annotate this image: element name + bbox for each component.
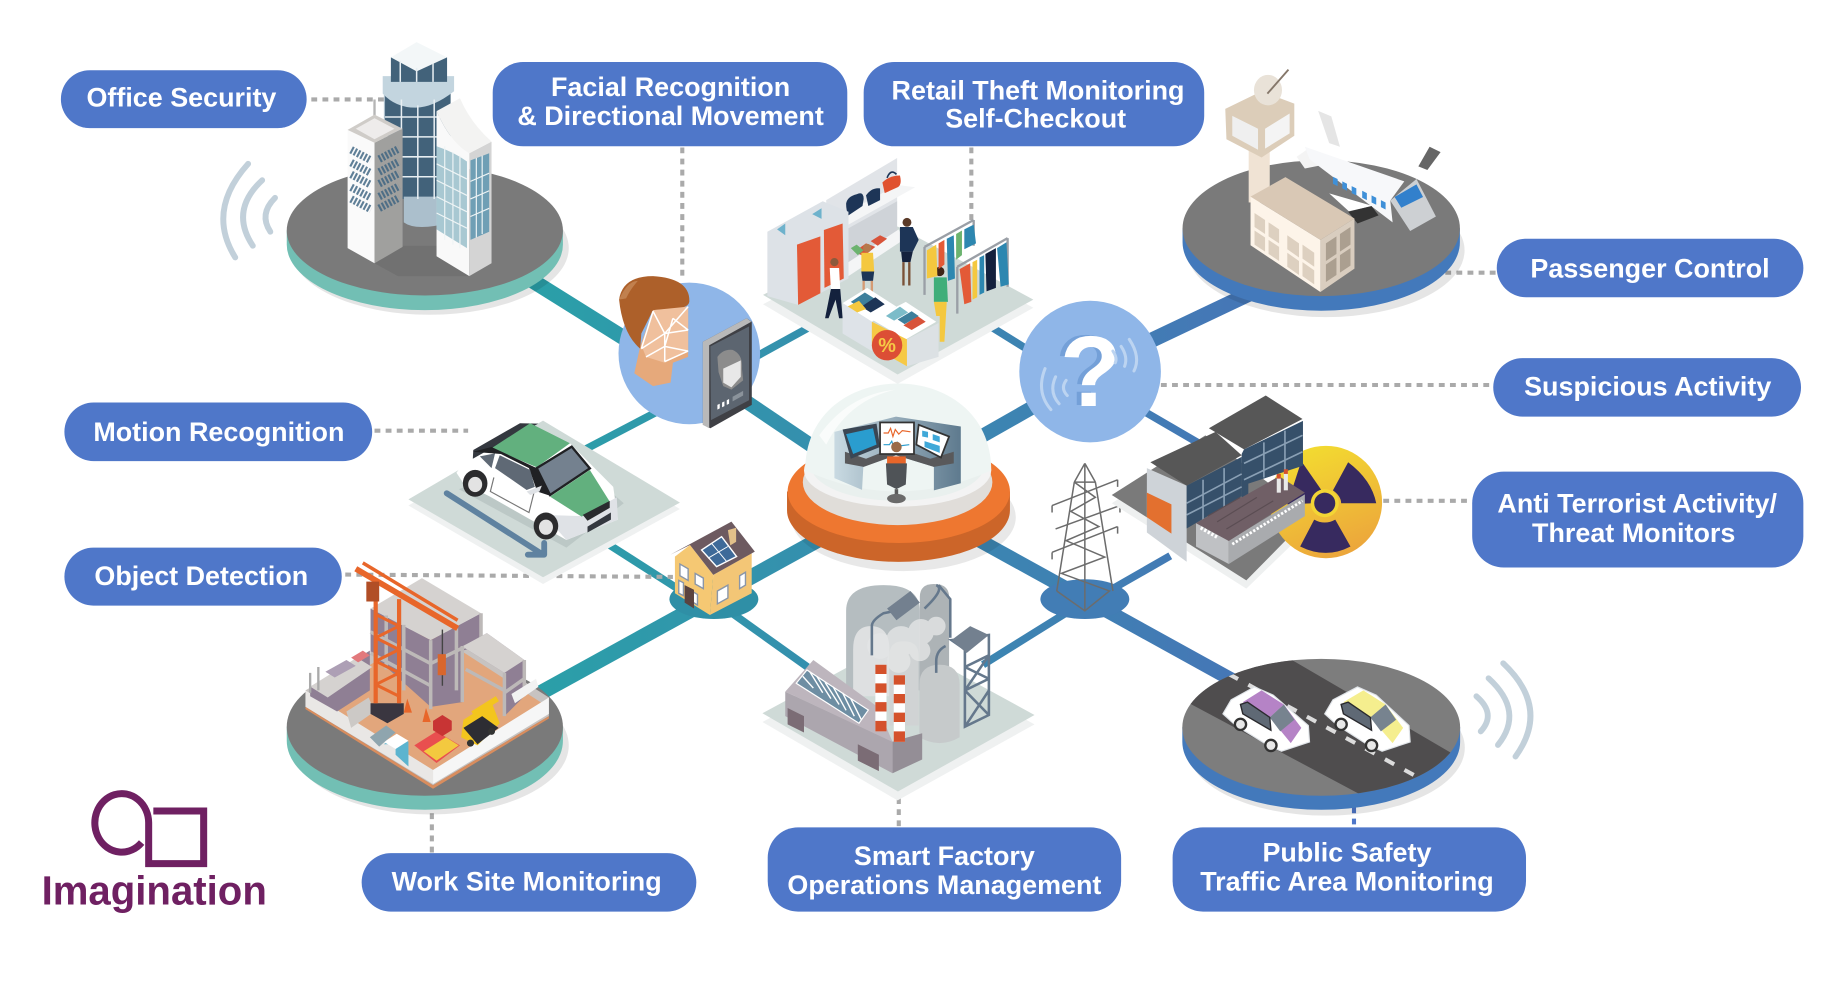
label: smart factory: Operations Management: [787, 870, 1101, 900]
icon: house: [670, 522, 755, 615]
dotted leader lines: [311, 99, 1497, 853]
monitors: [843, 424, 880, 459]
label: anti terrorist activity: [1472, 472, 1803, 568]
icon: green car: [456, 423, 618, 540]
icon: wireless waves: [1476, 663, 1530, 757]
panel: traffic disc: [1182, 658, 1534, 816]
label: anti terrorist activity: Threat Monitors: [1532, 518, 1735, 548]
icon: inner waves: [1041, 339, 1137, 410]
label: facial recognition: [493, 62, 847, 146]
panel: suspicious activity: ?: [1060, 316, 1121, 428]
label: work site monitoring: [362, 853, 696, 912]
shelving wall: [826, 158, 897, 263]
icon: fitting rooms: [767, 201, 848, 305]
label: motion recognition: Motion Recognition: [93, 417, 344, 447]
label: suspicious activity: Suspicious Activity: [1524, 372, 1771, 402]
icon: wireless waves: [223, 164, 275, 257]
icon: bags: [846, 172, 901, 215]
icon: left office block: [348, 115, 403, 263]
icon: smartphone: [703, 318, 752, 428]
label: work site monitoring: Work Site Monitoring: [392, 867, 662, 897]
icon: terminal building: [1251, 177, 1354, 292]
label: facial recognition: Facial Recognition: [551, 72, 790, 102]
panel: suspicious activity: ?: [1055, 315, 1117, 427]
label: public safety: [1173, 827, 1526, 912]
icon: plant building: [1147, 396, 1305, 564]
panel: retail store: [763, 158, 1033, 384]
icon: construction site: [305, 563, 549, 789]
logo: Imagination: [42, 794, 267, 914]
icon: radiation symbol: [1270, 446, 1382, 558]
panel: car motion plate: [408, 421, 680, 584]
label: motion recognition: [64, 403, 372, 461]
icon: control room: [834, 417, 961, 503]
road: [1190, 660, 1450, 794]
panel: suspicious activity: [1019, 301, 1161, 442]
icon: control tower: [1225, 70, 1294, 202]
label: retail theft: [864, 62, 1204, 146]
icon: steel frame: [872, 585, 989, 727]
panel: facial recognition: [619, 276, 760, 428]
label: suspicious activity: [1493, 358, 1801, 417]
label: object detection: [64, 548, 342, 606]
icon: purple car: [1223, 687, 1310, 751]
panel: airport disc: [1183, 70, 1465, 317]
panel: house hub: [669, 522, 758, 619]
label: anti terrorist activity: Anti Terrorist Activity/: [1497, 489, 1777, 519]
icon: yellow car: [1325, 687, 1410, 751]
label: facial recognition: & Directional Movement: [517, 101, 824, 131]
icon: pylon: [1052, 463, 1120, 611]
label: object detection: Object Detection: [94, 561, 308, 591]
label: passenger control: Passenger Control: [1530, 253, 1770, 283]
label: smart factory: [768, 827, 1121, 912]
operator chair: [891, 442, 902, 452]
label: retail theft: Retail Theft Monitoring: [892, 75, 1185, 105]
panel: nuclear plant: [1112, 396, 1382, 589]
icon: right curved building: [437, 98, 492, 276]
icon: head with mesh: [619, 276, 689, 386]
icon: movement arrow: [447, 493, 544, 555]
icon: airplane: [1297, 111, 1441, 231]
panel: smart factory: [762, 584, 1035, 800]
label: public safety: Public Safety: [1262, 837, 1431, 867]
label: office security: Office Security: [86, 82, 276, 112]
icon: storage tanks: [846, 584, 960, 743]
panel: power hub: [1040, 463, 1129, 619]
network connection lines: [529, 279, 1252, 693]
panel: office security disc: [223, 42, 569, 315]
icon: clothes racks: [925, 220, 1009, 314]
icon: smokestacks: [875, 665, 905, 742]
label: smart factory: Smart Factory: [854, 841, 1035, 871]
label: office security: [61, 70, 307, 128]
label: passenger control: [1497, 239, 1803, 297]
label: retail theft: Self-Checkout: [945, 104, 1126, 134]
icon: display tables: %: [878, 335, 896, 357]
icon: display tables: [843, 288, 939, 366]
label: public safety: Traffic Area Monitoring: [1200, 867, 1494, 897]
panel: central monitoring dome: [787, 384, 1016, 571]
icon: shoppers: [825, 218, 948, 342]
logo: Imagination: Imagination: [42, 868, 267, 914]
icon: factory building: [785, 660, 922, 773]
icon: central glass tower: [383, 42, 454, 227]
panel: work site disc: [287, 563, 569, 814]
icon: steam: [867, 617, 946, 673]
